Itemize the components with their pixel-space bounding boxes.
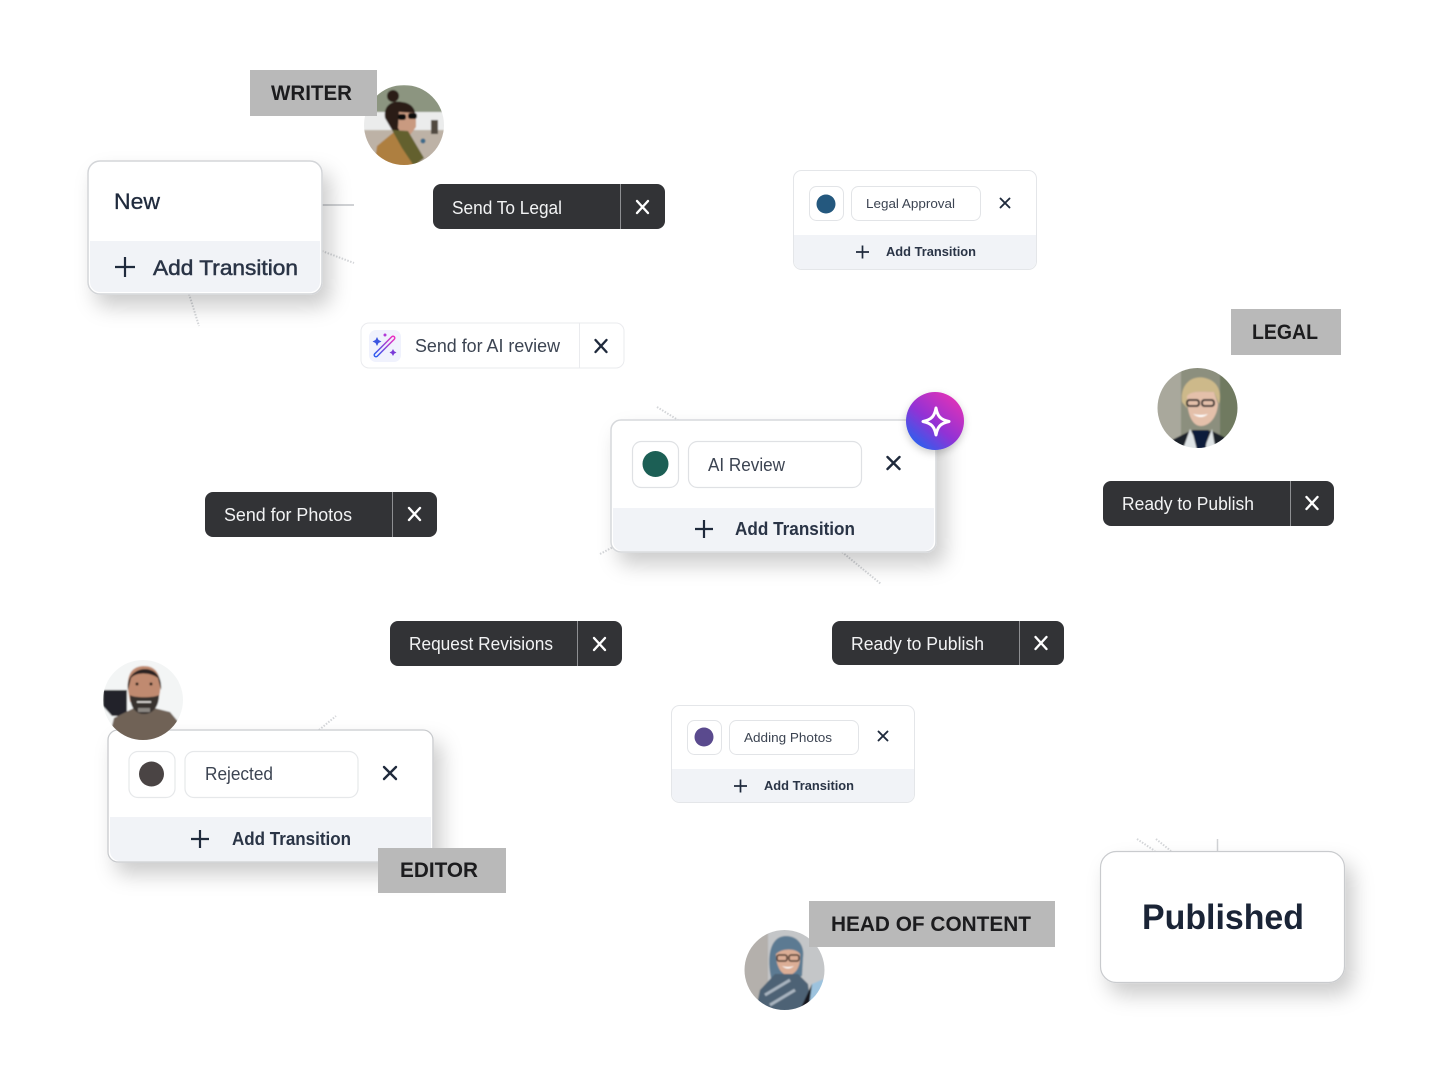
connector stubs: Published: [1137, 839, 1218, 851]
card: Rejected: [108, 730, 433, 862]
button: Send for AI review: Send for AI review: [415, 336, 561, 356]
button: Ready to Publish (legal): Ready to Publish: [1122, 494, 1254, 514]
button: Send To Legal: [433, 184, 665, 229]
avatar: writer: [364, 85, 444, 165]
avatar: legal: [1158, 368, 1238, 448]
icon: AI sparkle badge: [906, 392, 964, 450]
status swatch: AI Review: [632, 442, 678, 488]
button: Send for AI review: [361, 323, 624, 368]
button: Ready to Publish (legal): [1103, 481, 1334, 526]
avatar: head of content: [744, 930, 824, 1010]
add transition: Legal Approval: Add Transition: [886, 244, 976, 259]
button: Ready to Publish (centre): Ready to Publish: [851, 634, 984, 654]
connector stubs: new: [189, 205, 354, 326]
status input: Rejected: [185, 752, 358, 798]
button: Send To Legal: Send To Legal: [452, 198, 562, 218]
status swatch: Adding Photos: [688, 720, 722, 754]
card: Adding Photos: [672, 706, 914, 802]
tag: head of content: HEAD OF CONTENT: [831, 913, 1031, 936]
card: Legal Approval: [794, 170, 1036, 270]
connector stub: Rejected: [319, 716, 336, 730]
status input: AI Review: AI Review: [708, 455, 786, 475]
tag: writer: WRITER: [271, 82, 352, 105]
card: AI Review: [611, 420, 936, 552]
card: Published: [1100, 852, 1344, 982]
tag: editor: [378, 848, 506, 893]
status input: Rejected: Rejected: [205, 764, 273, 784]
status input: Adding Photos: [730, 720, 858, 754]
status swatch: Legal Approval: [810, 186, 844, 220]
connector stubs: AI Review: [600, 407, 881, 584]
button: Send for Photos: Send for Photos: [224, 505, 352, 525]
status input: AI Review: [688, 442, 862, 488]
icon: magic wand: [369, 330, 401, 362]
status input: Adding Photos: Adding Photos: [744, 730, 833, 745]
tag: legal: [1231, 309, 1341, 355]
card: Published: Published: [1142, 898, 1304, 937]
add transition: Adding Photos: Add Transition: [764, 778, 854, 793]
tag: writer: [250, 70, 377, 116]
status input: Legal Approval: [852, 186, 980, 220]
button: Request Revisions: Request Revisions: [409, 634, 553, 654]
tag: legal: LEGAL: [1252, 321, 1318, 344]
button: Send for Photos: [205, 492, 437, 537]
add transition: Rejected: Add Transition: [232, 829, 351, 849]
card title: New: New: [114, 189, 160, 214]
tag: head of content: [809, 901, 1055, 947]
card: New: [88, 161, 322, 294]
add transition: AI Review: Add Transition: [735, 519, 855, 539]
add transition: New: Add Transition: [153, 257, 298, 280]
tag: editor: EDITOR: [400, 859, 478, 882]
status swatch: Rejected: [129, 752, 175, 798]
button: Request Revisions: [390, 621, 622, 666]
button: Ready to Publish (centre): [832, 621, 1064, 665]
avatar: editor: [103, 660, 183, 740]
status input: Legal Approval: Legal Approval: [866, 196, 955, 211]
